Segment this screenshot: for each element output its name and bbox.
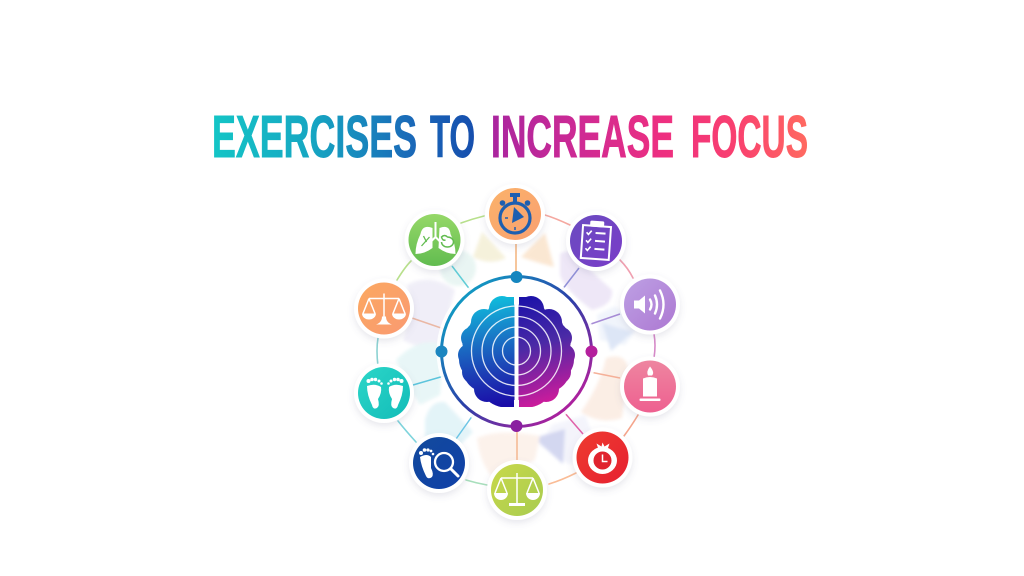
icon: pair of feet <box>366 378 404 409</box>
title: TO <box>430 103 475 170</box>
icon: candle <box>640 366 660 401</box>
icon: speaker <box>634 290 664 318</box>
node: foot search <box>409 433 469 493</box>
icon: stopwatch <box>500 193 530 233</box>
node: checklist <box>566 211 626 271</box>
concentric focus rings <box>472 306 562 396</box>
central hub: brain and ring <box>436 271 598 432</box>
node: tomato timer <box>572 428 632 488</box>
icon: balance scale <box>362 294 406 324</box>
brain <box>458 296 575 407</box>
node: orange balance <box>354 278 414 338</box>
title: EXERCISES <box>212 103 417 170</box>
title <box>212 103 808 170</box>
icon: balance scale <box>494 473 540 506</box>
icon: footprint and magnifier <box>419 448 458 478</box>
node: footprints <box>354 363 414 423</box>
title: FOCUS <box>691 103 808 170</box>
icon: tomato timer <box>588 442 617 474</box>
ring nodes <box>436 271 598 432</box>
node: lungs <box>404 210 464 270</box>
node: candle <box>620 356 680 416</box>
spokes from hub to exercise nodes <box>412 244 620 460</box>
pale background shapes <box>396 232 640 480</box>
node: sound <box>620 274 680 334</box>
outer ring connectors <box>377 215 655 485</box>
icon: lungs <box>416 222 456 254</box>
node: green balance <box>487 460 547 520</box>
ring <box>442 276 592 426</box>
title: INCREASE <box>491 103 674 170</box>
node: stopwatch <box>485 184 545 244</box>
icon: clipboard <box>581 220 611 260</box>
